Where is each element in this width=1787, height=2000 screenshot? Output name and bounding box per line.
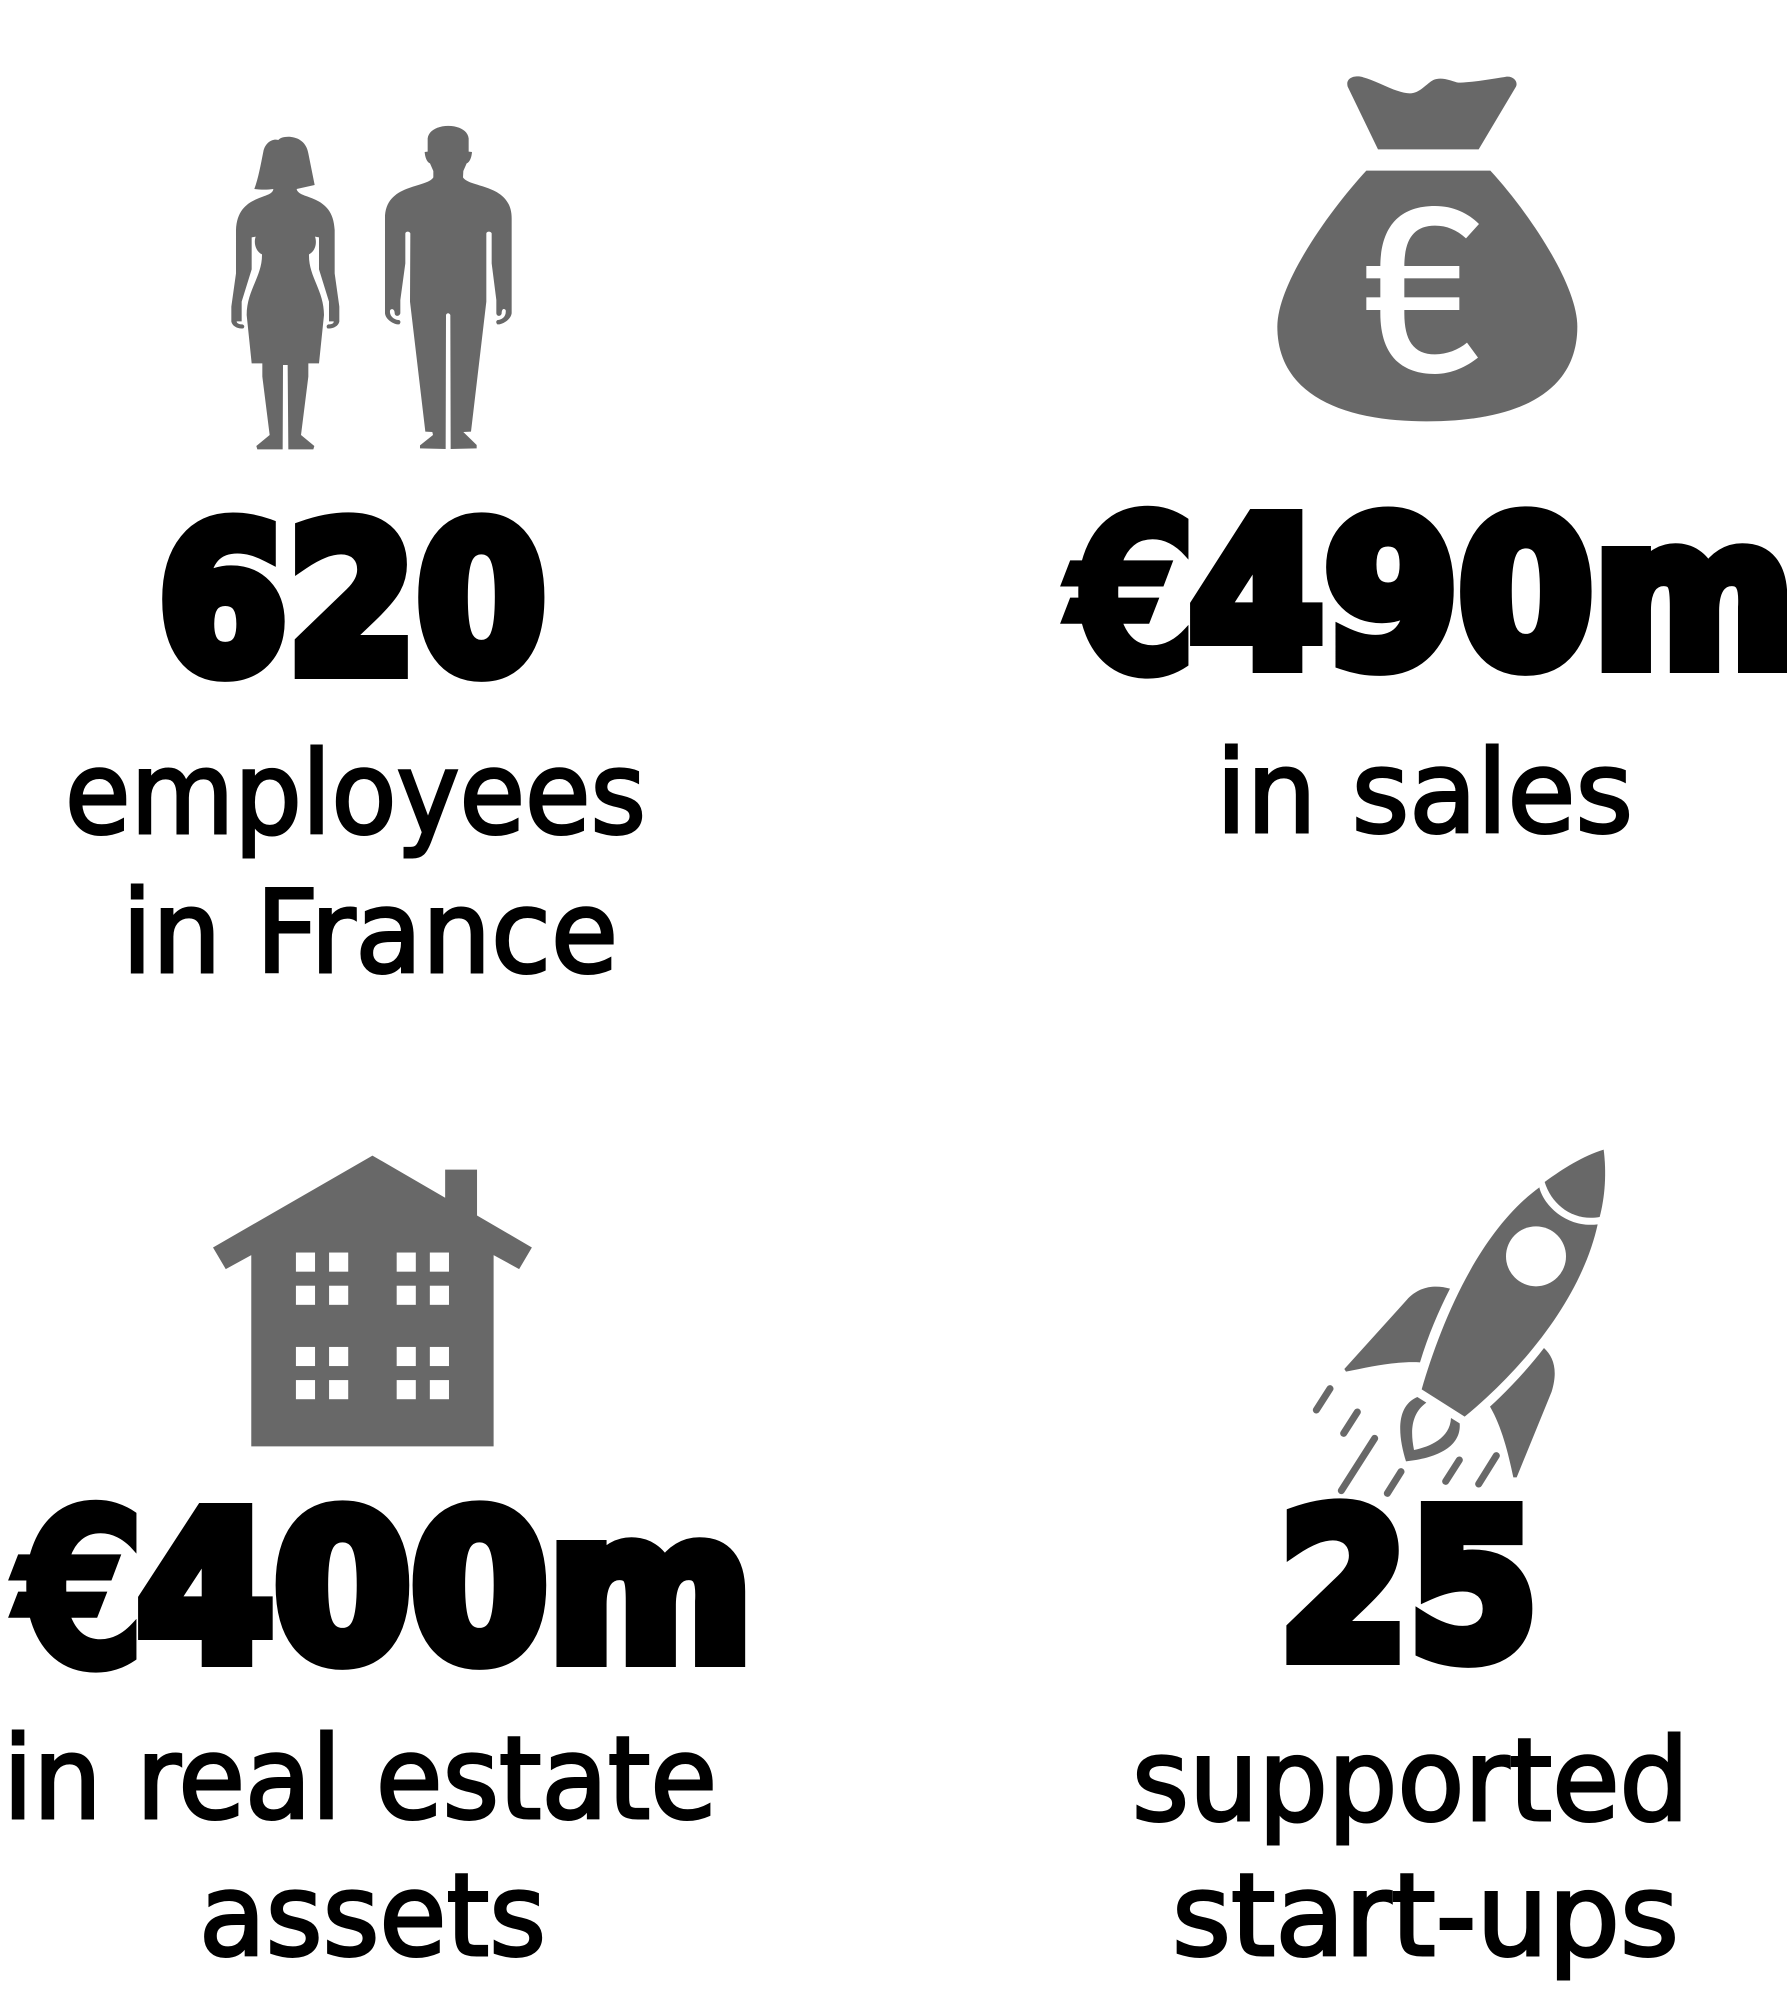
figure: 620: 620 (158, 483, 546, 719)
panel: real estate (3, 1156, 753, 1982)
figure: €400m: € (11, 1462, 147, 1720)
label: in sales: in sales (1216, 726, 1633, 859)
figure: €490m: € (1063, 468, 1199, 726)
panel: employees (65, 126, 646, 999)
label: in France: in France (122, 866, 618, 999)
figure: 25: 25 (1279, 1469, 1538, 1705)
label: in real estate: in real estate (3, 1712, 717, 1845)
label: start-ups: start-ups (1172, 1849, 1679, 1982)
label: assets: assets (199, 1849, 546, 1982)
icon: rocket (1316, 1150, 1605, 1493)
icon: woman and man silhouettes (231, 126, 512, 449)
label: employees: employees (65, 727, 646, 860)
panel: start-ups (1132, 1150, 1689, 1982)
panel: sales (1063, 76, 1787, 859)
figure: €400m: 400m (137, 1471, 753, 1707)
label: supported: supported (1132, 1714, 1689, 1847)
icon: apartment building house (213, 1156, 532, 1446)
icon: money bag with euro sign (1277, 76, 1577, 421)
